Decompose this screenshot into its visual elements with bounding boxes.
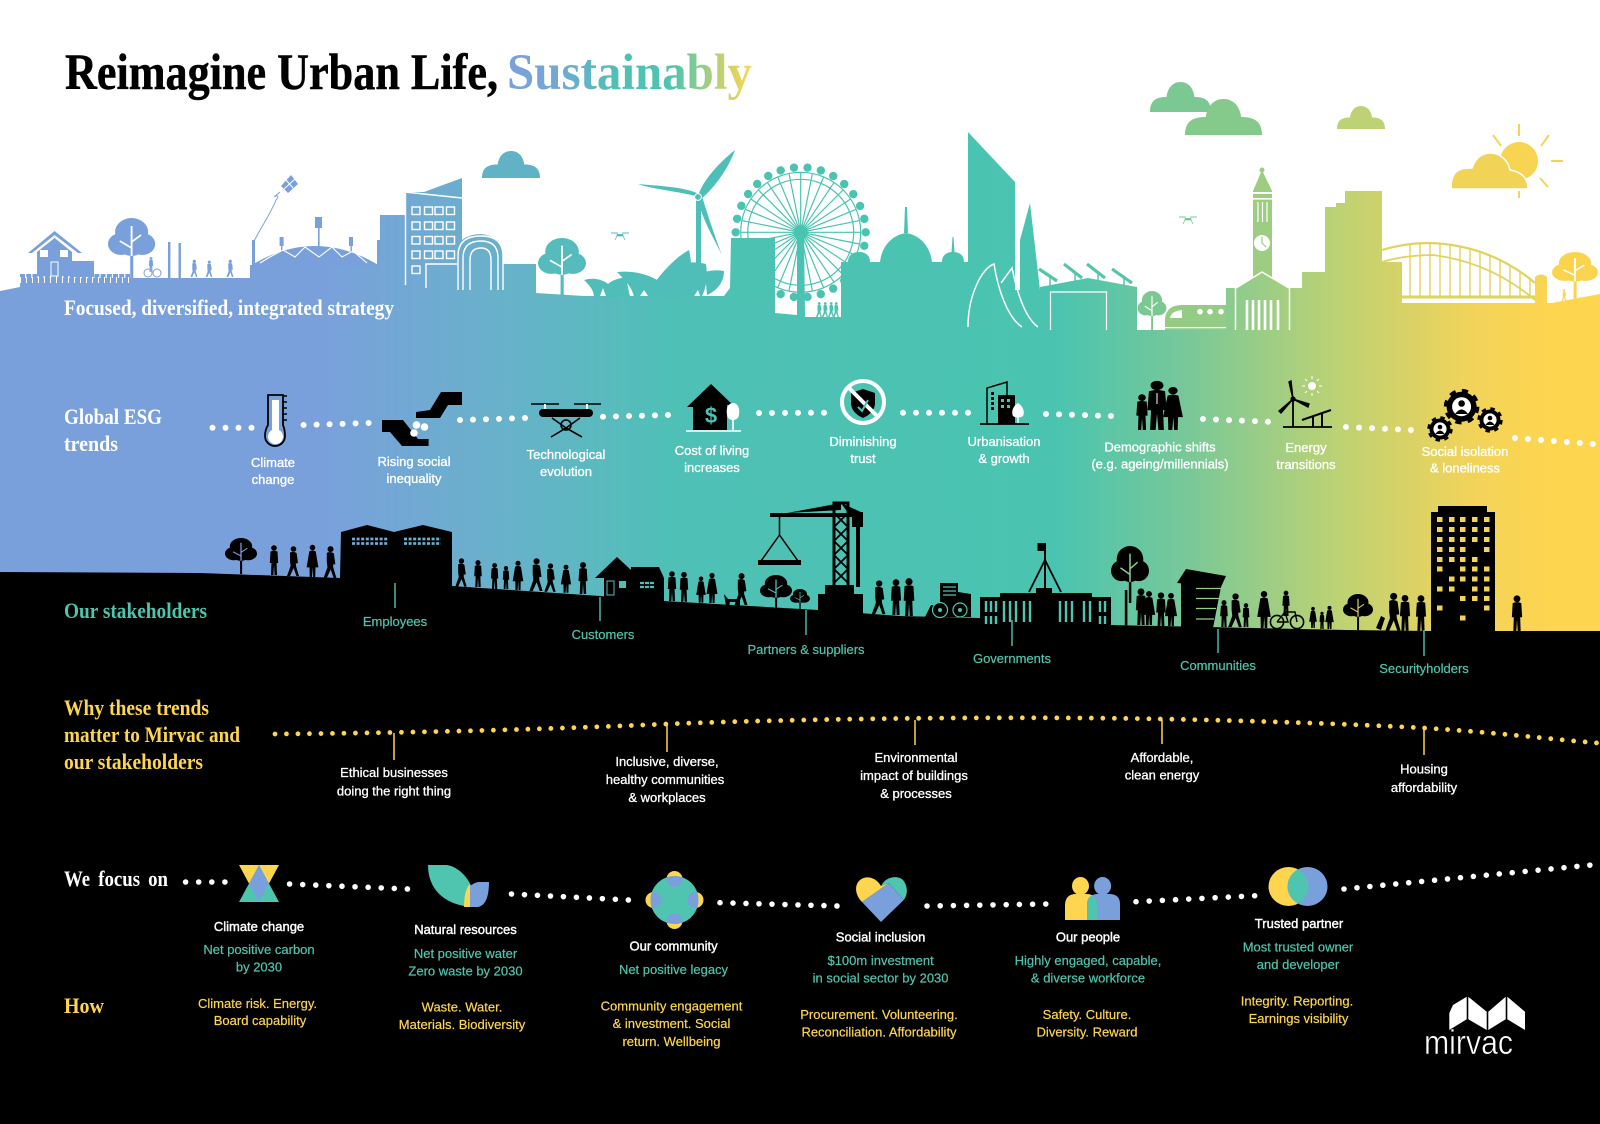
label: Social isolation (1422, 444, 1508, 459)
black hill with buildings (0, 525, 1600, 1124)
text: housing: affordability (1391, 780, 1458, 795)
harbour bridge (1382, 243, 1547, 300)
heading: why these trends matter: Why these trends (64, 695, 209, 720)
label: communities: Communities (1180, 658, 1256, 673)
how: & investment. Social (613, 1016, 730, 1031)
heading: Natural resources (414, 922, 517, 937)
label: Diminishing (829, 434, 897, 449)
icon: circle of people (646, 871, 704, 929)
text: environmental: impact of buildings (860, 768, 968, 783)
heading: Trusted partner (1255, 916, 1344, 931)
how: Materials. Biodiversity (399, 1017, 526, 1032)
house (595, 557, 664, 601)
dotted line: trends (212, 413, 1593, 444)
text: affordable energy: clean energy (1125, 768, 1200, 782)
heading: Social inclusion (836, 930, 925, 944)
icon: thermometer (265, 395, 287, 446)
heading: why these trends matter: matter to Mirvac and (64, 722, 240, 747)
tractor (925, 583, 971, 618)
how: Procurement. Volunteering. (800, 1007, 958, 1022)
target: Zero waste by 2030 (408, 964, 523, 978)
house and fence (20, 231, 130, 283)
label: Rising social (378, 454, 451, 469)
label: Climate (251, 455, 295, 470)
solar building (1039, 264, 1132, 330)
label: (e.g. ageing/millennials) (1091, 456, 1229, 472)
trees (225, 538, 1373, 630)
icon: drone (531, 404, 601, 437)
icon: no trust shield (842, 381, 884, 423)
panel: stakeholder labels (363, 583, 1469, 676)
label: trust (850, 451, 876, 466)
text: ethical: Ethical businesses (340, 765, 448, 780)
column: natural resources (399, 865, 526, 1032)
how: Reconciliation. Affordability (801, 1024, 957, 1040)
icon: leaves (428, 865, 489, 907)
people: employees (270, 545, 336, 578)
how: Waste. Water. (422, 1000, 502, 1014)
label: Cost of living (675, 443, 749, 458)
icon: gears with people (1430, 392, 1500, 440)
heading: global ESG trends: trends (64, 431, 118, 456)
target: & diverse workforce (1031, 970, 1145, 986)
block in front of wheel (731, 238, 775, 298)
stems (395, 583, 1424, 656)
target: Highly engaged, capable, (1015, 953, 1161, 968)
label: governments: Governments (973, 651, 1052, 666)
label: transitions (1276, 457, 1336, 472)
tree and walker (1552, 252, 1598, 301)
label: & loneliness (1430, 460, 1501, 476)
how: Safety. Culture. (1043, 1007, 1131, 1022)
target: by 2030 (236, 960, 282, 974)
people, cyclist and family (1220, 591, 1334, 629)
icon: overlapping circles (1268, 867, 1328, 906)
label: Energy (1285, 440, 1327, 455)
target: $100m investment (827, 953, 934, 968)
tree (108, 218, 155, 278)
stems (394, 720, 1424, 760)
icon: hourglass (239, 865, 279, 902)
heading: why these trends matter (64, 695, 240, 774)
label: partners: Partners & suppliers (747, 642, 865, 657)
cloud: blue (482, 151, 540, 178)
column: social inclusion (800, 877, 958, 1040)
how: Diversity. Reward (1037, 1024, 1137, 1040)
how: Integrity. Reporting. (1241, 994, 1353, 1008)
target: Most trusted owner (1243, 940, 1354, 954)
parliament (980, 543, 1111, 627)
text: inclusive: & workplaces (628, 790, 706, 805)
kite (252, 175, 298, 245)
how: Board capability (214, 1013, 307, 1028)
icon: wind and solar (1279, 376, 1332, 427)
opera house (584, 250, 724, 298)
label: employees: Employees (363, 614, 428, 629)
heading: how: How (64, 993, 104, 1018)
heading: global ESG trends (64, 404, 162, 456)
column: our people (1015, 877, 1161, 1040)
text: inclusive: Inclusive, diverse, (615, 754, 719, 769)
icon: hands and coins (382, 392, 462, 446)
crowd under wheel (816, 302, 839, 317)
label: Demographic shifts (1104, 440, 1216, 454)
icon: sun and cloud (1451, 124, 1563, 198)
heading: we focus on: We focus on (64, 866, 168, 891)
gradient land band and skyline silhouette (0, 132, 1600, 640)
target: Net positive legacy (619, 962, 729, 977)
label: securityholders: Securityholders (1379, 661, 1469, 676)
office building windows (405, 192, 503, 290)
heading: why these trends matter: our stakeholders (64, 749, 203, 774)
column: trusted partner (1241, 867, 1354, 1026)
label: change (252, 472, 294, 487)
label: evolution (540, 464, 592, 479)
dotted line: focus (186, 865, 1592, 906)
column: our community (601, 871, 743, 1049)
heading: Climate change (214, 919, 304, 934)
panel: focus areas (198, 865, 1354, 1049)
how: return. Wellbeing (622, 1034, 721, 1049)
target: in social sector by 2030 (813, 970, 949, 986)
label: increases (684, 460, 740, 475)
people: walking crowd (455, 558, 587, 594)
ferris wheel (736, 167, 866, 297)
train (1165, 305, 1226, 330)
office tower (1431, 506, 1495, 632)
label: Technological (527, 447, 605, 462)
text: environmental: Environmental (874, 750, 958, 765)
panel: why these trends matter (337, 720, 1458, 805)
panel: stakeholder silhouettes (225, 503, 1522, 632)
text: affordable energy: Affordable, (1131, 750, 1193, 765)
factory windows (352, 539, 441, 544)
title: Reimagine Urban Life, (65, 45, 498, 101)
logo: mirvac (1424, 997, 1525, 1062)
icon: two people (1065, 877, 1120, 920)
dotted line: why it matters (275, 718, 1597, 743)
people: partners (872, 578, 914, 616)
tree (1138, 291, 1166, 331)
people: securityholders (1376, 593, 1522, 632)
icon: house with dollar: $ (705, 403, 717, 428)
icon: heart (856, 877, 907, 922)
text: ethical: doing the right thing (337, 784, 451, 798)
people and dog (668, 571, 747, 606)
label: & growth (978, 451, 1030, 466)
clouds: green (1150, 82, 1385, 135)
column: climate change (198, 865, 317, 1028)
heading: our stakeholders: Our stakeholders (64, 598, 207, 623)
icon: house with dollar (686, 384, 741, 431)
heading: Our community (630, 938, 718, 954)
text: environmental: & processes (880, 786, 952, 801)
heading: strategy: Focused, diversified, integrated strategy (64, 295, 394, 320)
how: Climate risk. Energy. (198, 996, 317, 1011)
logo: mirvac: mirvac (1424, 1024, 1513, 1062)
label: inequality (387, 471, 442, 486)
heading: Our people (1056, 930, 1120, 944)
text: inclusive: healthy communities (606, 772, 725, 787)
tree (538, 238, 586, 296)
panel: skyline details (20, 82, 1598, 331)
title: Sustainably (507, 45, 752, 101)
domes (841, 207, 968, 264)
how: Community engagement (601, 998, 743, 1014)
icon: family (1136, 381, 1183, 430)
heading: global ESG trends: Global ESG (64, 404, 162, 429)
label: Urbanisation (968, 434, 1040, 449)
clock tower and town hall (1236, 168, 1290, 330)
stadium (250, 217, 380, 266)
panel: global trends (251, 376, 1508, 487)
target: and developer (1257, 957, 1340, 972)
sails (968, 264, 1038, 327)
posts, cyclist and runners (144, 242, 233, 278)
crane (758, 503, 863, 614)
tall building (1177, 569, 1226, 628)
icon: drones (611, 217, 1197, 240)
how: Earnings visibility (1249, 1011, 1349, 1026)
target: Net positive carbon (203, 942, 315, 957)
label: customers: Customers (572, 627, 635, 642)
text: housing: Housing (1400, 762, 1448, 776)
target: Net positive water (414, 946, 518, 961)
people: communities group (1136, 588, 1177, 626)
wind turbine (638, 150, 735, 265)
icon: urbanisation (980, 382, 1029, 424)
